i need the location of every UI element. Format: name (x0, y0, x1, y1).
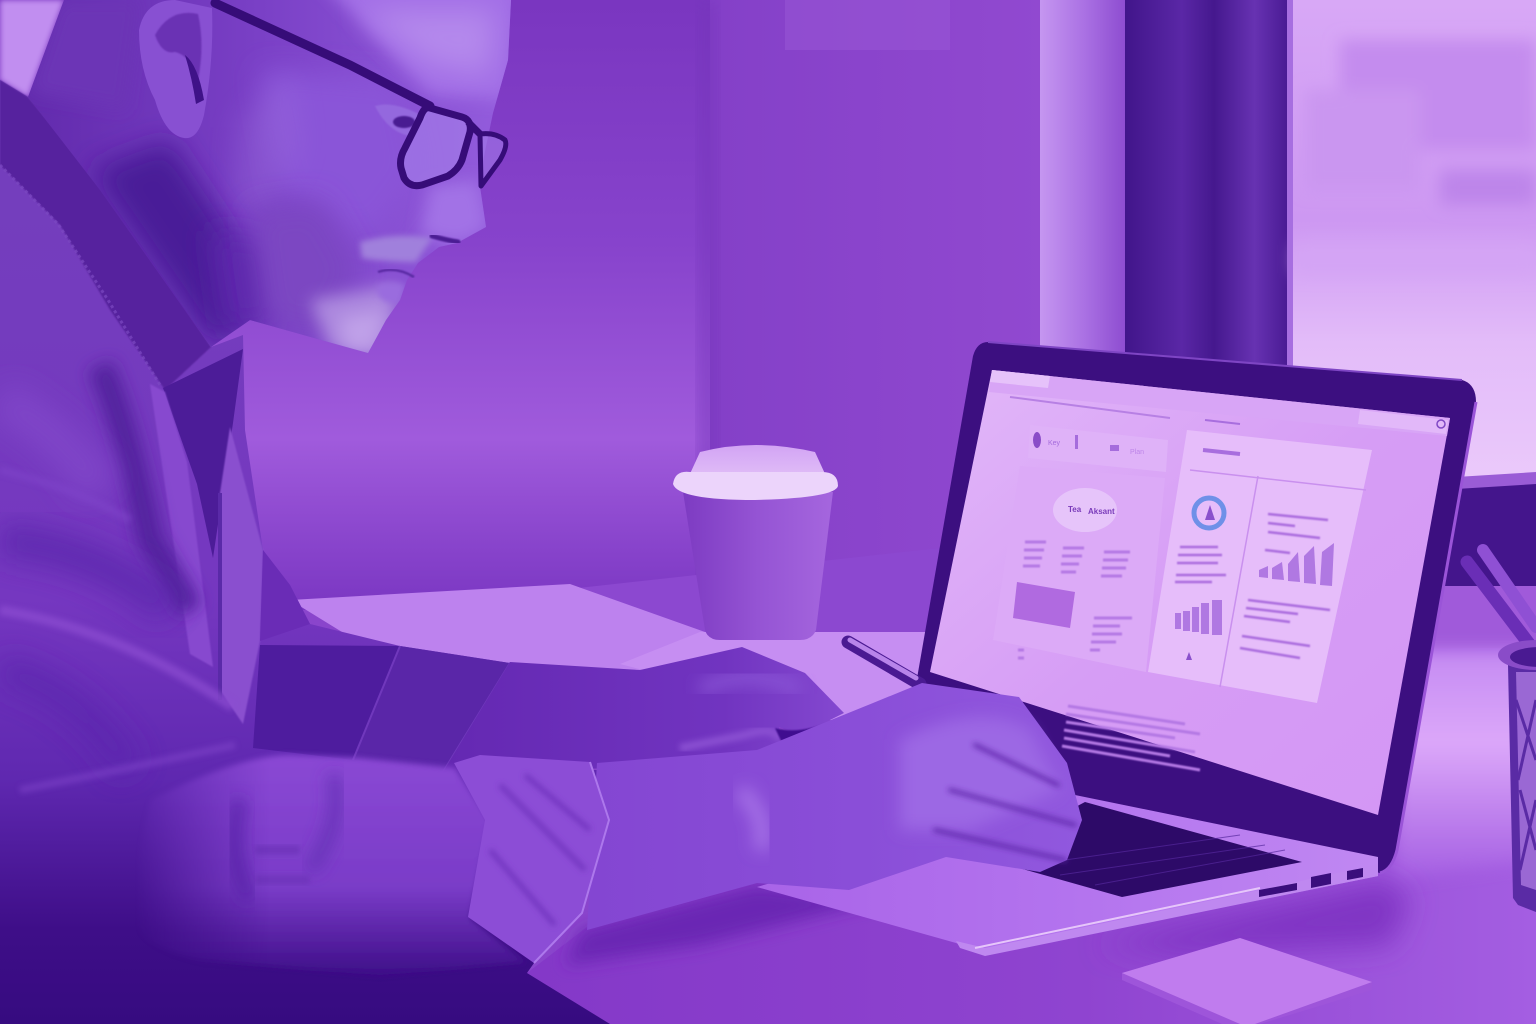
neck shade (90, 140, 255, 347)
jaw shade (212, 234, 267, 324)
moustache (360, 236, 432, 262)
placket (150, 384, 213, 667)
right report panel (1148, 430, 1372, 703)
chest folds (0, 400, 100, 490)
caption lines under reports (1062, 706, 1200, 770)
beard shading (246, 204, 348, 324)
top summary strip: Key (1048, 440, 1061, 447)
near forearm and hand (587, 683, 1082, 930)
desk surfaces (290, 548, 1536, 1024)
left report card (993, 466, 1165, 672)
laptop screen (930, 370, 1450, 815)
eye (375, 104, 426, 136)
left report card: Tea (1068, 505, 1082, 514)
man: shirt torso and collar (0, 80, 610, 1024)
near sleeve (126, 755, 525, 975)
text lines, middle column (1175, 514, 1330, 658)
sticky notepad (1122, 938, 1372, 1024)
back of head (40, 26, 64, 88)
lower lip (378, 282, 405, 303)
laptop lid and bezel (915, 342, 1476, 873)
ear (139, 0, 212, 138)
window reveal, curtain and pane (1040, 0, 1536, 590)
bar chart, lower (1175, 600, 1222, 635)
back wall (0, 0, 1042, 620)
pen (848, 640, 920, 684)
man: head and face (0, 0, 520, 360)
laptop base and keyboard (757, 795, 1378, 956)
sideburn (235, 102, 287, 204)
upper left light patch behind head (0, 0, 64, 97)
nostril (432, 236, 458, 242)
top summary strip (1028, 425, 1168, 472)
glasses (215, 3, 506, 186)
top summary strip: Plan (1130, 449, 1144, 456)
pencil holder with pencils (1467, 550, 1536, 912)
cheek (261, 70, 374, 218)
left report card: Aksant (1088, 507, 1115, 516)
bar chart, upper (1259, 543, 1334, 586)
inner shirt (163, 349, 243, 558)
browser toolbar (989, 370, 1450, 436)
nose (420, 180, 488, 244)
dark groove beside placket (100, 366, 190, 610)
collar (0, 80, 211, 390)
far hand (443, 647, 844, 772)
coffee cup (673, 445, 838, 640)
far sleeve (253, 550, 510, 772)
lit forehead (320, 0, 520, 100)
near sleeve cuff (454, 755, 609, 963)
donut chart (1194, 498, 1224, 528)
